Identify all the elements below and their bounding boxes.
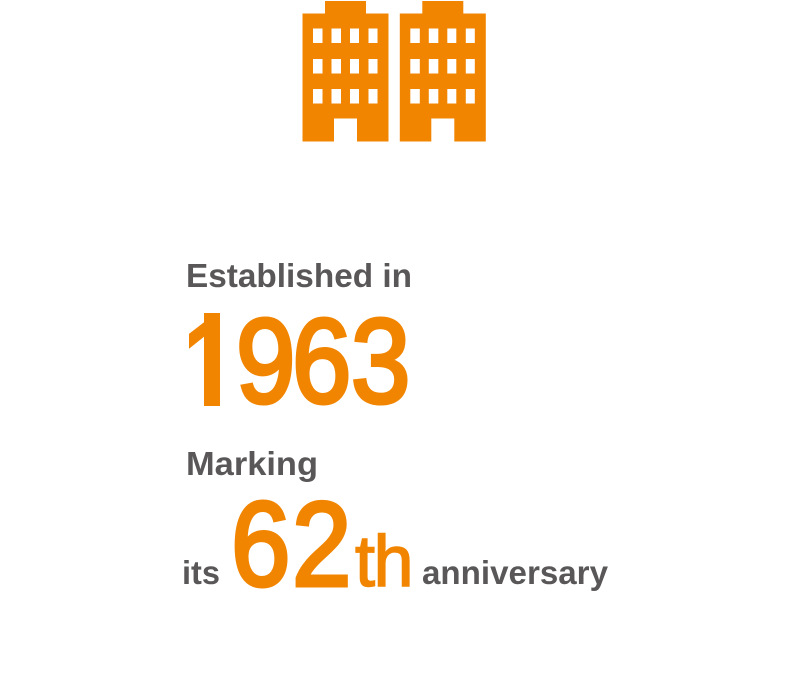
ordinal suffix: th: th [355,522,414,602]
icon: left building [302,1,388,142]
heading: established in: Established in [186,257,412,294]
text: anniversary: anniversary [422,554,609,591]
text: its: its [182,554,220,591]
text: marking: Marking [186,445,318,482]
icon: right building [400,1,486,142]
number: 62: 62 [231,478,351,612]
number: 1963: 1963 [180,295,410,430]
icon: two office buildings [302,1,486,142]
